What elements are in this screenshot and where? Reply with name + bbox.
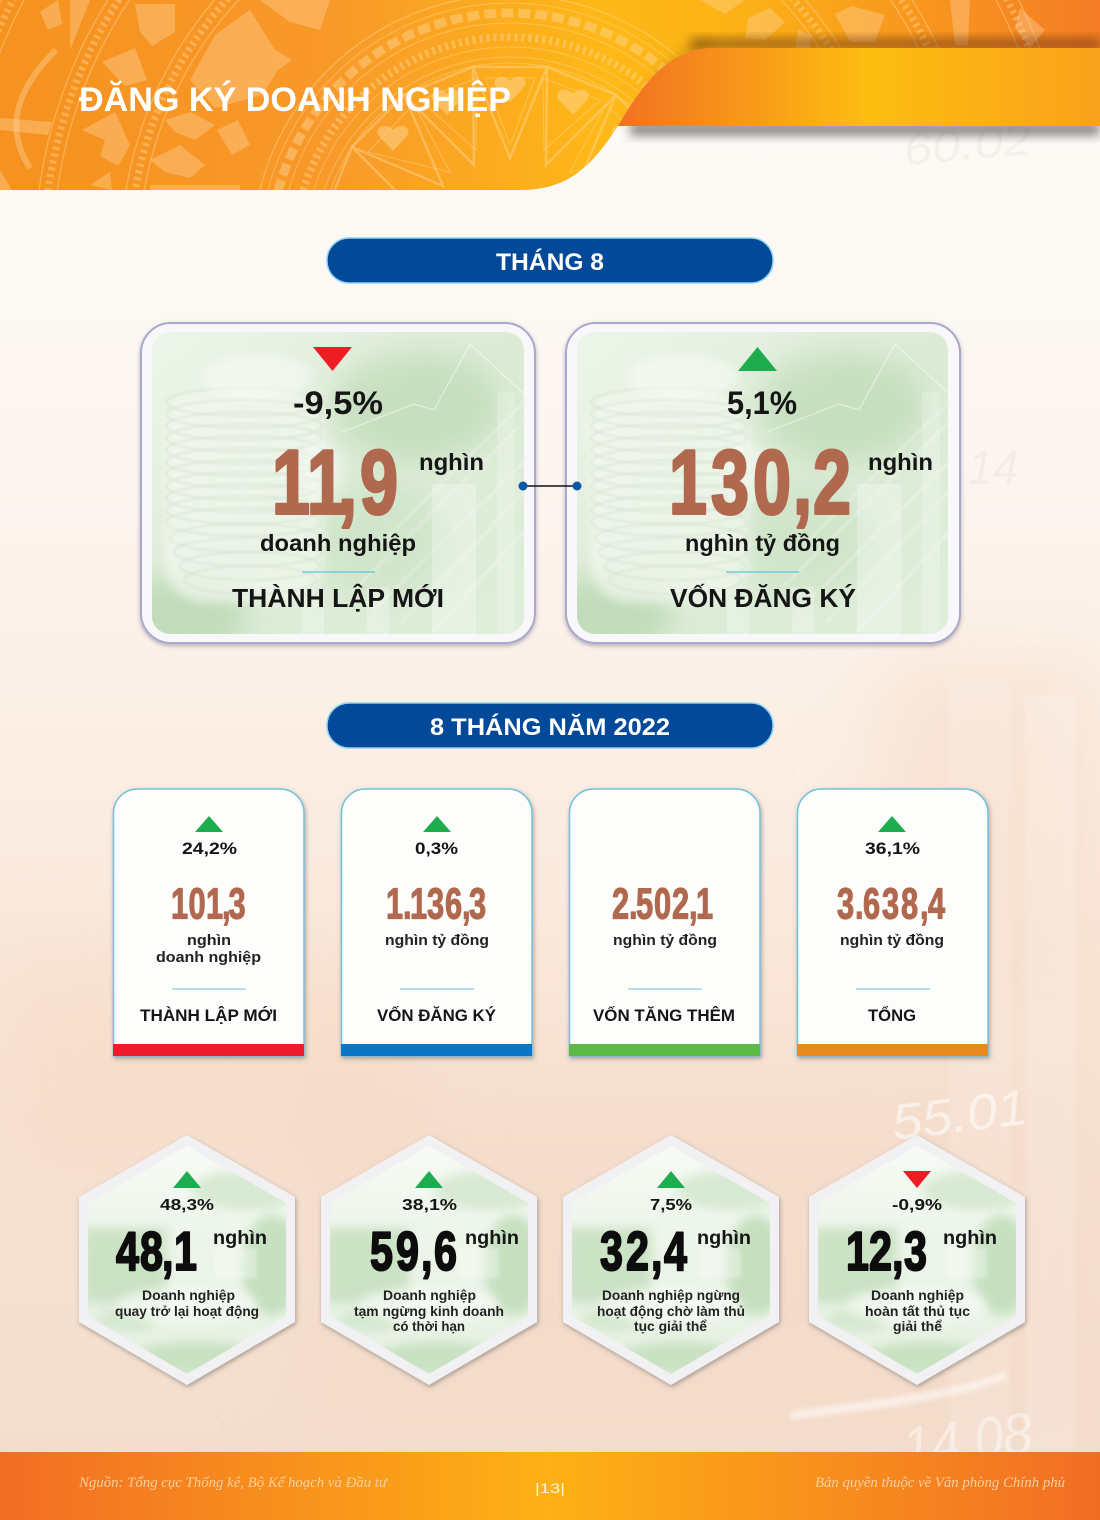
card: thành lập mới — [113, 789, 304, 1056]
big number: 11,9 — [272, 432, 398, 534]
icon: up triangle — [415, 1171, 443, 1188]
icon: red down triangle — [903, 1171, 931, 1188]
percent: -0,9% — [892, 1197, 942, 1214]
card title: VỐN ĐĂNG KÝ — [670, 583, 856, 613]
change percent: 5,1% — [727, 385, 797, 421]
source note: Nguồn: Tổng cục Thống kê, Bộ Kế hoạch và Đầu tư — [78, 1475, 388, 1491]
connector between cards — [518, 482, 582, 490]
card title: THÀNH LẬP MỚI — [232, 583, 444, 613]
unit line 2: doanh nghiệp — [156, 949, 261, 966]
description line 3: có thời hạn — [393, 1318, 465, 1334]
description line 3: giải thể — [893, 1318, 942, 1334]
page background: 14.08 — [899, 1401, 1036, 1481]
label: VỐN ĐĂNG KÝ — [377, 1005, 497, 1025]
description line 2: tạm ngừng kinh doanh — [354, 1303, 504, 1319]
footer bar — [0, 1452, 1100, 1520]
hexagon: ngừng hoạt động chờ làm thủ tục giải thể — [561, 1135, 786, 1385]
value: 32,4 — [600, 1221, 687, 1282]
percent: 48,3% — [160, 1197, 214, 1214]
card: vốn tăng thêm — [569, 789, 760, 1056]
percent: 38,1% — [402, 1197, 457, 1214]
band shadow — [630, 38, 1100, 136]
percent: 24,2% — [182, 839, 237, 858]
title: ĐĂNG KÝ DOANH NGHIỆP — [79, 81, 511, 119]
unit: nghìn — [419, 449, 484, 475]
label: TỔNG — [868, 1006, 916, 1025]
description: Doanh nghiệp — [871, 1287, 964, 1303]
big number: 130,2 — [669, 432, 851, 534]
unit: nghìn tỷ đồng — [385, 932, 489, 949]
unit: nghìn — [868, 449, 933, 475]
unit: nghìn — [697, 1228, 751, 1249]
unit: nghìn — [187, 932, 231, 949]
unit: nghìn — [943, 1228, 997, 1249]
hexagon: tạm ngừng kinh doanh — [319, 1135, 544, 1385]
hexagon: quay trở lại hoạt động — [77, 1135, 302, 1385]
card: vốn đăng ký — [341, 789, 532, 1056]
value: 1.136,3 — [386, 880, 486, 929]
value: 48,1 — [116, 1221, 197, 1282]
section pill: Tháng 8: THÁNG 8 — [496, 248, 604, 276]
description line 2: quay trở lại hoạt động — [115, 1303, 259, 1319]
card: tổng — [797, 789, 988, 1056]
copyright: Bản quyền thuộc về Văn phòng Chính phủ — [815, 1475, 1065, 1491]
unit: nghìn — [465, 1228, 519, 1249]
value: 12,3 — [846, 1221, 927, 1282]
unit label: nghìn tỷ đồng — [685, 530, 840, 556]
icon: red down triangle — [313, 347, 352, 371]
description: Doanh nghiệp ngừng — [602, 1287, 740, 1303]
description: Doanh nghiệp — [383, 1287, 476, 1303]
percent: 36,1% — [865, 839, 920, 858]
unit label: doanh nghiệp — [260, 530, 416, 556]
section pill: Tháng 8 — [327, 238, 773, 283]
birds and figures — [0, 0, 1045, 190]
page background: 60.02 — [902, 115, 1033, 175]
header banner — [0, 0, 1100, 190]
icon: up triangle — [657, 1171, 685, 1188]
page background: 55.01 — [889, 1079, 1030, 1151]
icon: up triangle — [173, 1171, 201, 1188]
change percent: -9,5% — [293, 385, 383, 421]
label: THÀNH LẬP MỚI — [140, 1006, 277, 1025]
unit: nghìn — [213, 1228, 267, 1249]
panel: vốn đăng ký (tháng 8) — [532, 323, 960, 657]
orange band — [618, 48, 1100, 126]
icon: up triangle — [195, 816, 223, 832]
value: 59,6 — [370, 1221, 457, 1282]
page background: 14 — [968, 442, 1018, 495]
description line 3: tục giải thể — [634, 1318, 707, 1334]
hexagon: hoàn tất thủ tục giải thể — [807, 1135, 1032, 1385]
page number: |13| — [535, 1480, 565, 1496]
value: 3.638,4 — [837, 880, 945, 929]
section pill: 8 tháng năm 2022 — [327, 703, 773, 748]
section pill: 8 tháng năm 2022: 8 THÁNG NĂM 2022 — [430, 713, 670, 741]
description line 2: hoàn tất thủ tục — [865, 1303, 970, 1319]
unit: nghìn tỷ đồng — [613, 932, 717, 949]
icon: up triangle — [878, 816, 906, 832]
value: 2.502,1 — [612, 880, 713, 929]
icon: green up triangle — [738, 347, 777, 371]
icon: up triangle — [423, 816, 451, 832]
unit: nghìn tỷ đồng — [840, 932, 944, 949]
bronze drum pattern — [0, 0, 1045, 190]
percent: 7,5% — [650, 1197, 692, 1214]
label: VỐN TĂNG THÊM — [593, 1005, 735, 1025]
value: 101,3 — [171, 880, 246, 929]
description: Doanh nghiệp — [142, 1287, 235, 1303]
panel: thành lập mới (tháng 8) — [107, 323, 535, 657]
percent: 0,3% — [415, 839, 458, 858]
description line 2: hoạt động chờ làm thủ — [597, 1303, 745, 1319]
